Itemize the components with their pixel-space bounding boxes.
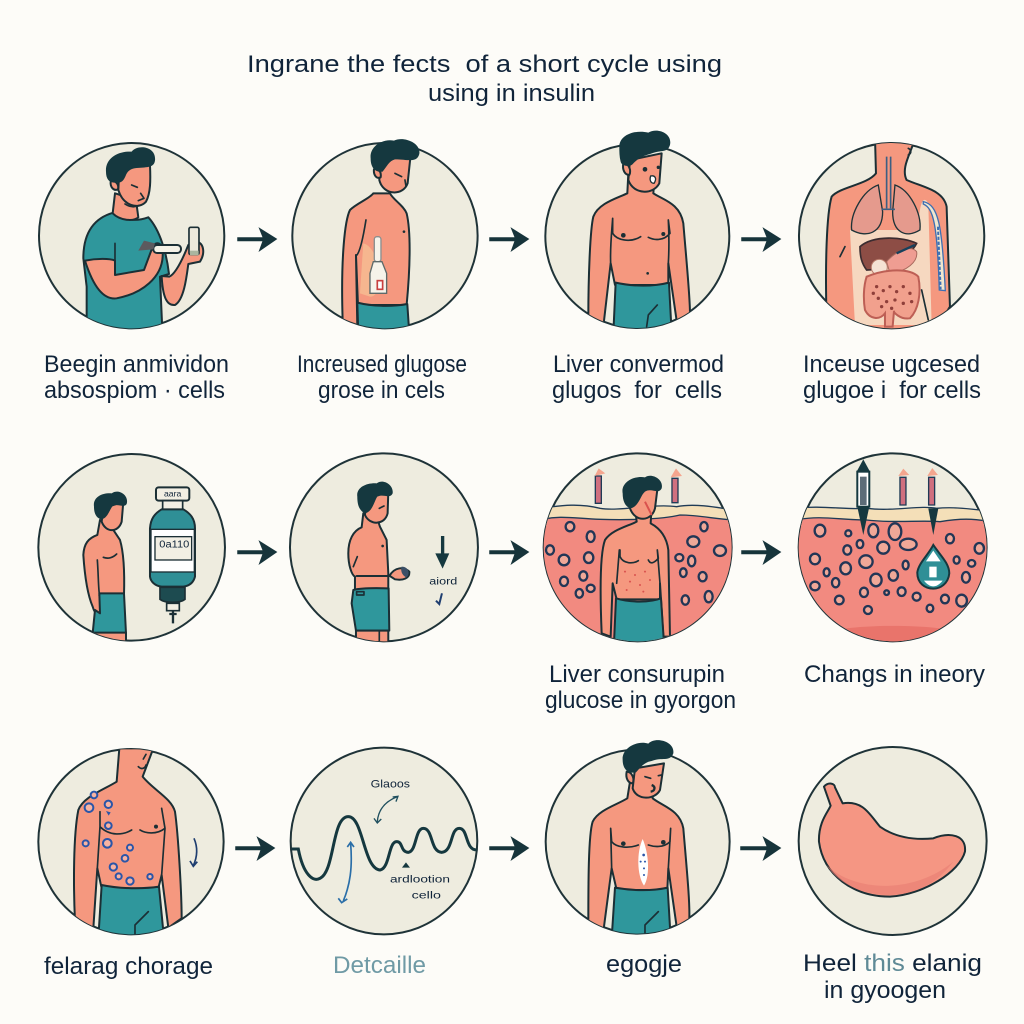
caption [44, 351, 229, 404]
illustration: shirtless man with white mark [546, 740, 730, 938]
tube [923, 202, 945, 291]
panel: step 9 man with skin cells [38, 748, 224, 980]
illustration: shirtless man front view [545, 131, 729, 333]
caption: absospiom · cells [44, 377, 225, 404]
cells label: cello [412, 890, 442, 901]
caption [545, 661, 736, 714]
caption: glugoe i for cells [803, 377, 981, 404]
neck [113, 193, 138, 220]
caption [297, 351, 467, 404]
insulin needles [595, 468, 682, 503]
icon: vial [189, 227, 199, 255]
caption: grose in cels [318, 377, 445, 404]
trachea [882, 157, 895, 209]
illustration: liver shape [799, 747, 987, 935]
title: using in insulin [428, 80, 595, 107]
arrow [490, 838, 528, 859]
intestines [864, 270, 920, 327]
illustration: torso with cell marks [38, 748, 224, 938]
panel: step 2 man with bottle on abdomen [292, 139, 478, 404]
arrow [742, 542, 780, 563]
arrow [238, 229, 276, 250]
caption: Beegin anmividon [44, 351, 229, 378]
icon: insulin bottle: aara [164, 489, 181, 499]
cells [546, 522, 726, 605]
caption: glucose in gyorgon [545, 687, 736, 714]
caption: Liver convermod [553, 351, 724, 378]
droplet [917, 545, 949, 589]
wave line [292, 817, 477, 879]
caption: Increused glugose [297, 351, 467, 378]
icon: insulin bottle: 0a110 [159, 539, 190, 550]
caption [803, 950, 982, 1004]
caption: Heel this elanig [803, 950, 982, 977]
small label: aiord [429, 577, 457, 588]
hair [106, 147, 155, 183]
caption: in gyoogen [824, 977, 946, 1004]
small label [429, 577, 457, 604]
arrow [490, 542, 528, 563]
glucose label [371, 779, 410, 823]
icon: down arrow [435, 536, 449, 569]
illustration: man and large bottle [38, 454, 225, 643]
caption: glugos for cells [552, 377, 722, 404]
caption: egogje [606, 951, 682, 978]
panel: step 3 standing man [545, 131, 729, 404]
panel: step 8 tissue cross-section [797, 453, 990, 688]
illustration: man holding pen and vial [39, 143, 224, 330]
illustration: tissue with needles and droplet [797, 453, 990, 647]
panel: step 1 man with insulin pen [39, 143, 229, 404]
illustration: man looking at hand [290, 453, 478, 644]
arrow [490, 229, 528, 250]
icon: insulin bottle [370, 237, 387, 293]
cells label [390, 862, 450, 901]
title: Ingrane the fects of a short cycle using [247, 51, 722, 78]
caption [552, 351, 724, 404]
caption [803, 351, 981, 404]
illustration: wave chart [291, 748, 477, 934]
arrow [742, 229, 780, 250]
icon: insulin pen [138, 241, 181, 253]
cells label: ardlootion [390, 874, 450, 885]
icon: insulin bottle [150, 487, 195, 623]
panel: step 11 man with abdominal mark [546, 740, 730, 978]
lungs [851, 185, 920, 234]
caption: Liver consurupin [549, 661, 725, 688]
icon: curved arrow [190, 838, 197, 866]
illustration: man over tissue cross-section [540, 453, 737, 647]
panel: step 5 man beside insulin bottle [38, 454, 225, 643]
caption: Inceuse ugcesed [803, 351, 980, 378]
arrow [236, 838, 274, 859]
face detail [908, 148, 911, 155]
caption: felarag chorage [44, 953, 213, 980]
arrow [238, 542, 276, 563]
cells [810, 523, 984, 614]
syringe [857, 459, 870, 535]
caption: Changs in ineory [804, 661, 985, 688]
white mark [638, 839, 648, 886]
glucose label: Glaoos [371, 779, 410, 791]
face [118, 165, 150, 206]
panel: step 4 internal organs [799, 137, 984, 404]
panel: step 10 glucose wave [291, 748, 477, 979]
title [247, 51, 722, 107]
arrow [741, 838, 780, 859]
needles [898, 468, 938, 535]
liver and stomach [860, 238, 917, 275]
caption: Detcaille [333, 952, 426, 979]
panel: step 6 man side view with down arrow [290, 453, 478, 644]
illustration: torso with organs [799, 137, 984, 333]
illustration: man with injection bottle [292, 139, 478, 333]
panel: step 7 man in skin layer [540, 453, 737, 714]
up arrow [338, 842, 354, 903]
panel: step 12 liver organ [799, 747, 987, 1004]
